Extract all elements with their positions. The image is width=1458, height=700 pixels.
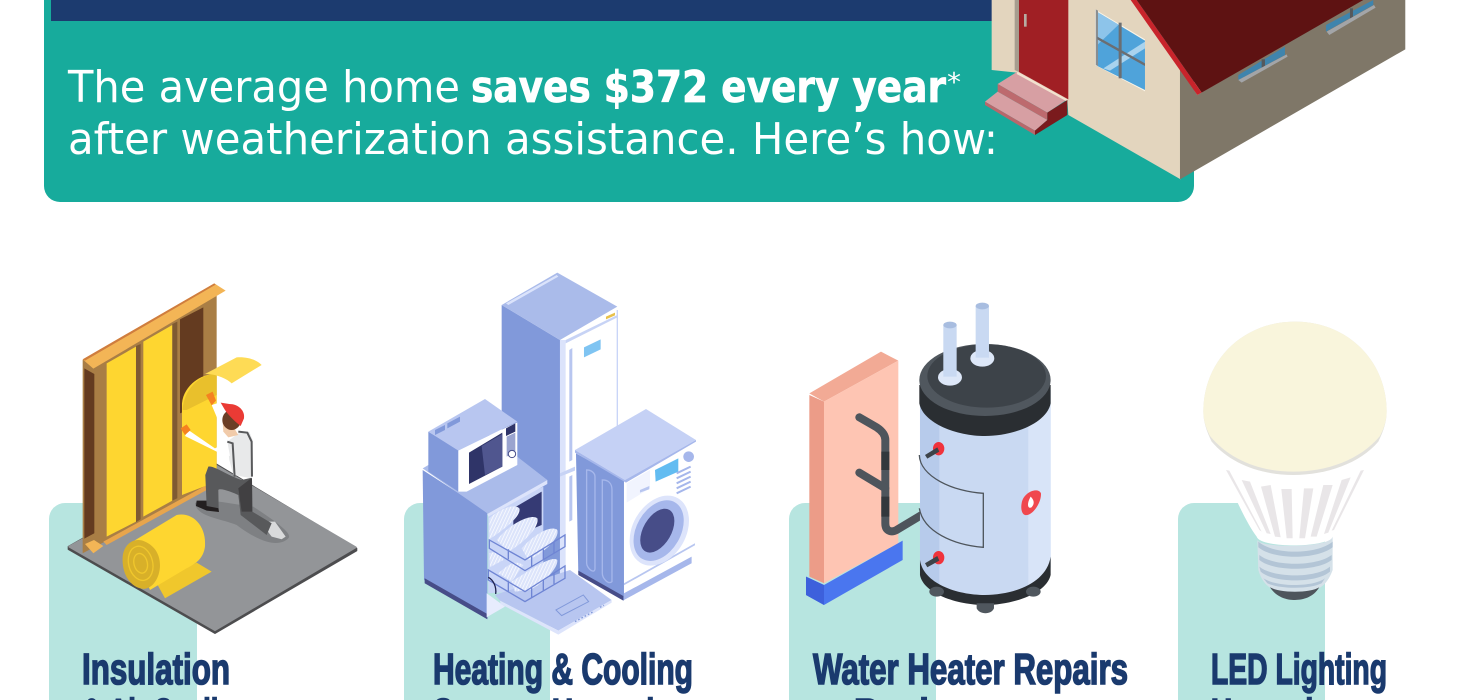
icon: insulation worker bbox=[68, 283, 357, 633]
text block: savings statement bbox=[67, 62, 998, 165]
panel: LED lighting card bbox=[1178, 503, 1325, 700]
icon: LED light bulb bbox=[1203, 322, 1387, 600]
floor bbox=[68, 463, 357, 633]
heading: heating and cooling system upgrades bbox=[433, 645, 693, 700]
screw thread bbox=[1257, 537, 1333, 593]
icon: side windows bbox=[1238, 0, 1376, 83]
icon: isometric house bbox=[985, 0, 1405, 179]
panel: water heater card bbox=[789, 503, 936, 700]
text block: savings statement: The average home bbox=[67, 62, 460, 113]
panel: insulation card bbox=[49, 503, 197, 700]
wall panel bbox=[806, 352, 903, 605]
globe rim bbox=[1203, 322, 1387, 475]
icon: entry steps bbox=[985, 72, 1067, 135]
heading: LED lighting upgrades bbox=[1211, 645, 1387, 700]
icon: home appliances bbox=[423, 273, 701, 635]
valves bbox=[925, 442, 944, 567]
microwave bbox=[428, 399, 517, 492]
flue pipes bbox=[938, 303, 994, 386]
text block: savings statement: * bbox=[947, 68, 961, 98]
panel: teal savings banner bbox=[44, 0, 1194, 202]
heading: insulation and air sealing: Insulation bbox=[82, 645, 230, 694]
icon: water heater bbox=[806, 303, 1051, 613]
text block: savings statement: after weatherization assistance. Here’s how: bbox=[68, 114, 998, 165]
text block: savings statement: saves $372 every year bbox=[471, 62, 946, 113]
heading: water heater repairs or replacement bbox=[813, 645, 1128, 700]
heading: heating and cooling system upgrades: Heating & Cooling bbox=[433, 645, 693, 694]
insulation roll bbox=[157, 563, 212, 598]
dishwasher bbox=[423, 432, 612, 635]
insulation sheet peeled bbox=[182, 374, 217, 495]
cooling fins bbox=[1226, 470, 1364, 538]
refrigerator bbox=[502, 273, 617, 593]
globe bbox=[1203, 322, 1387, 472]
washing machine bbox=[575, 409, 701, 601]
tank bbox=[919, 344, 1051, 613]
panel: heating and cooling card bbox=[404, 503, 550, 700]
heading: water heater repairs or replacement: Water Heater Repairs bbox=[813, 645, 1128, 694]
navy header strip bbox=[51, 0, 996, 21]
icon: front window bbox=[1095, 9, 1145, 91]
pipes bbox=[859, 417, 922, 531]
wall frame bbox=[83, 290, 217, 553]
bulb base bbox=[1220, 457, 1368, 545]
worker figure bbox=[181, 392, 286, 539]
